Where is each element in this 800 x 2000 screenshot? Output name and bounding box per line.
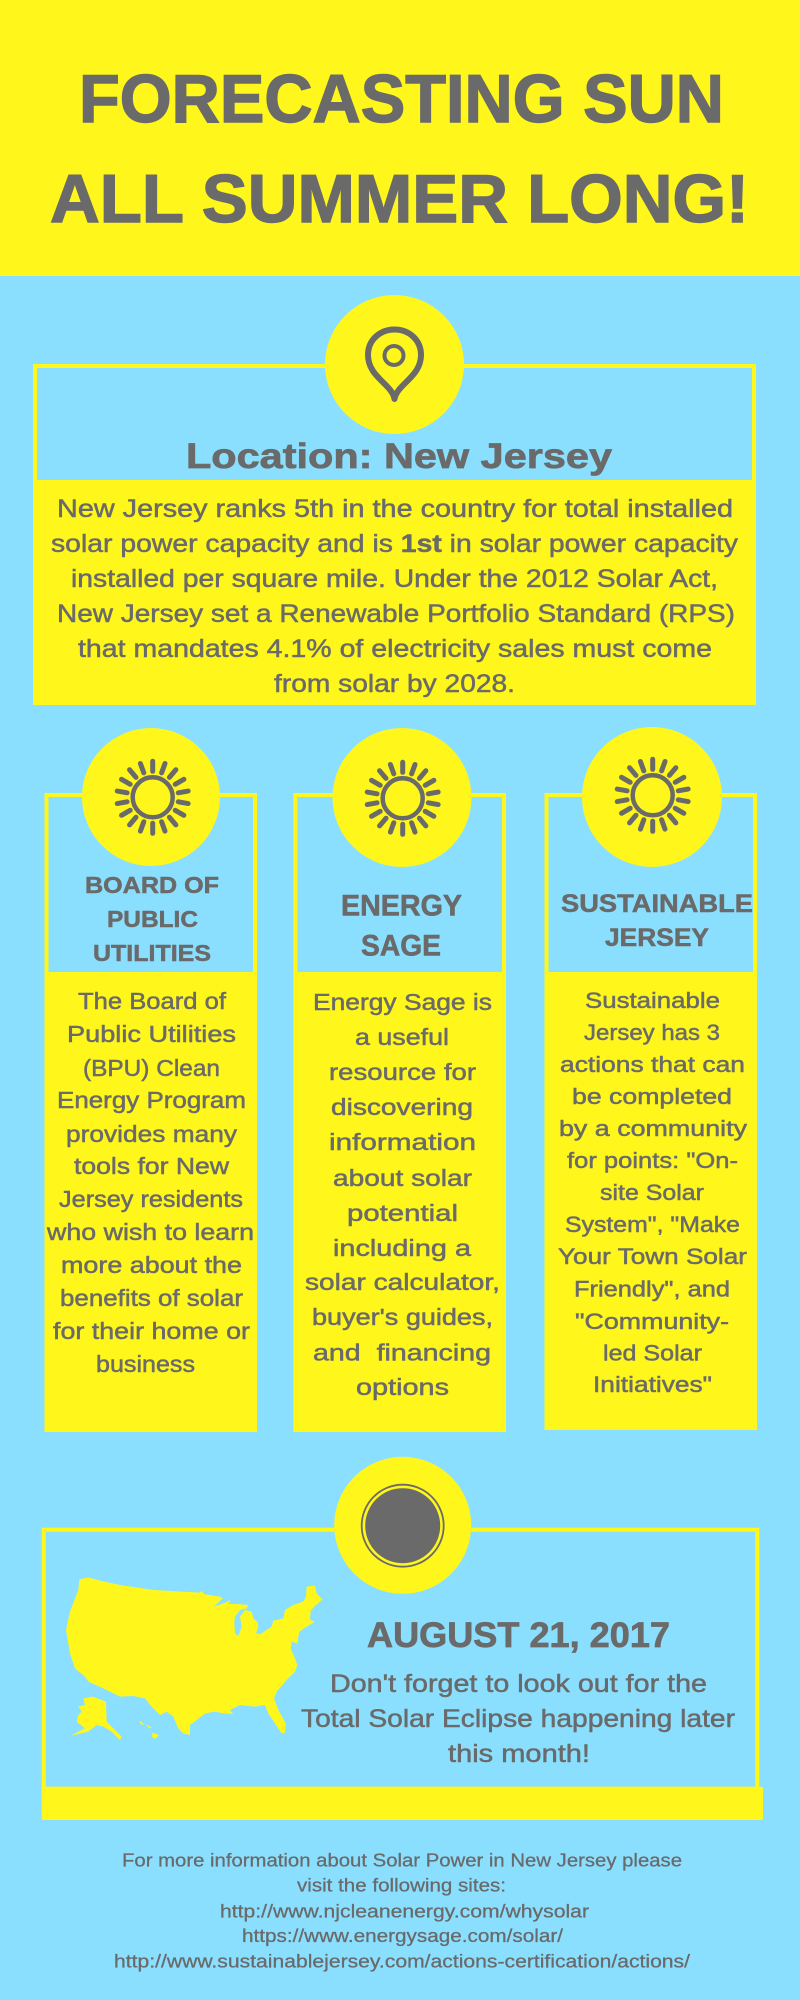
body: board of public utilities [46, 988, 254, 1377]
body: sustainable jersey: Sustainable [585, 988, 720, 1013]
panel: board of public utilities [44, 728, 257, 1432]
panel: location [33, 295, 756, 705]
panel: eclipse [42, 1457, 763, 1820]
location body text: solar power capacity and is 1st in solar power capacity [51, 530, 739, 558]
location body text: New Jersey ranks 5th in the country for total installed [57, 495, 733, 523]
heading: energy sage: ENERGY [341, 890, 462, 922]
body: board of public utilities: Public Utilities [67, 1021, 236, 1047]
footer: sources: http://www.sustainablejersey.com/actions-certification/actions/ [114, 1951, 690, 1971]
body: sustainable jersey: "Community- [575, 1309, 729, 1334]
body: sustainable jersey: site Solar [600, 1180, 704, 1205]
heading: energy sage: SAGE [361, 930, 441, 962]
icon: sun [617, 759, 688, 831]
body: sustainable jersey: actions that can [560, 1052, 745, 1077]
body: energy sage: discovering [331, 1094, 473, 1120]
heading: energy sage [341, 890, 462, 962]
body: board of public utilities: more about the [61, 1252, 242, 1278]
body: board of public utilities: tools for New [74, 1153, 229, 1179]
title banner [0, 0, 800, 276]
footer: sources: For more information about Solar Power in New Jersey please [122, 1851, 682, 1871]
body: sustainable jersey: be completed [572, 1084, 732, 1109]
body: energy sage: potential [347, 1200, 458, 1226]
icon: map of united states [66, 1577, 322, 1740]
eclipse message: Don't forget to look out for the [330, 1670, 707, 1698]
footer: sources: visit the following sites: [297, 1876, 506, 1896]
body: energy sage: information [329, 1129, 476, 1155]
location body text: that mandates 4.1% of electricity sales must come [78, 635, 712, 663]
body: board of public utilities: business [96, 1351, 195, 1377]
body: energy sage: resource for [329, 1059, 476, 1085]
body: board of public utilities: who wish to learn [46, 1219, 254, 1245]
body: energy sage: options [356, 1374, 449, 1400]
heading: board of public utilities [85, 872, 219, 966]
heading: board of public utilities: PUBLIC [107, 906, 198, 932]
heading: sustainable jersey: JERSEY [605, 924, 709, 952]
body: sustainable jersey [558, 988, 747, 1397]
body: energy sage: and financing [313, 1340, 491, 1366]
body: energy sage: Energy Sage is [313, 989, 492, 1015]
location body text: from solar by 2028. [274, 670, 515, 698]
eclipse message: this month! [448, 1740, 590, 1768]
heading: board of public utilities: BOARD OF [85, 872, 219, 898]
heading: board of public utilities: UTILITIES [93, 940, 211, 966]
body: board of public utilities: The Board of [78, 988, 227, 1014]
eclipse message: Total Solar Eclipse happening later [301, 1705, 735, 1733]
body: energy sage: buyer's guides, [312, 1304, 493, 1330]
body: sustainable jersey: Initiatives" [593, 1372, 712, 1397]
eclipse message [301, 1670, 735, 1768]
body: energy sage: including a [333, 1235, 471, 1261]
body: sustainable jersey: led Solar [603, 1340, 702, 1366]
panel: sustainable jersey [544, 727, 757, 1430]
body: board of public utilities: (BPU) Clean [83, 1055, 220, 1081]
location body text: New Jersey set a Renewable Portfolio Standard (RPS) [57, 600, 735, 628]
body: board of public utilities: provides many [66, 1121, 238, 1147]
icon: sun [117, 761, 188, 833]
body: energy sage [305, 989, 500, 1400]
icon: sun [367, 762, 438, 834]
footer: sources: http://www.njcleanenergy.com/whysolar [220, 1901, 589, 1921]
body: sustainable jersey: for points: "On- [567, 1148, 738, 1173]
body: sustainable jersey: System", "Make [565, 1212, 740, 1237]
body: sustainable jersey: by a community [559, 1116, 747, 1141]
body: sustainable jersey: Jersey has 3 [584, 1020, 720, 1045]
body: board of public utilities: for their home or [53, 1318, 250, 1344]
body: sustainable jersey: Your Town Solar [558, 1244, 747, 1269]
body: board of public utilities: benefits of solar [60, 1285, 243, 1311]
panel: energy sage [293, 728, 506, 1432]
body: energy sage: about solar [333, 1165, 472, 1191]
heading: sustainable jersey: SUSTAINABLE [561, 890, 753, 918]
body: energy sage: a useful [355, 1024, 449, 1050]
footer: sources [114, 1851, 690, 1971]
location heading: Location: New Jersey [186, 437, 613, 476]
location body text: installed per square mile. Under the 2012 Solar Act, [71, 565, 718, 593]
eclipse date heading: AUGUST 21, 2017 [367, 1616, 670, 1655]
footer: sources: https://www.energysage.com/solar/ [242, 1926, 563, 1946]
title text [50, 61, 749, 237]
icon: eclipse disc [362, 1485, 444, 1567]
body: board of public utilities: Jersey residents [59, 1186, 243, 1212]
heading: sustainable jersey [561, 890, 753, 952]
body: sustainable jersey: Friendly", and [574, 1276, 730, 1302]
title text: ALL SUMMER LONG! [50, 161, 749, 237]
title text: FORECASTING SUN [79, 61, 724, 137]
location body text [51, 495, 739, 698]
body: board of public utilities: Energy Program [57, 1087, 246, 1113]
icon: location pin [368, 330, 421, 399]
body: energy sage: solar calculator, [305, 1269, 500, 1295]
